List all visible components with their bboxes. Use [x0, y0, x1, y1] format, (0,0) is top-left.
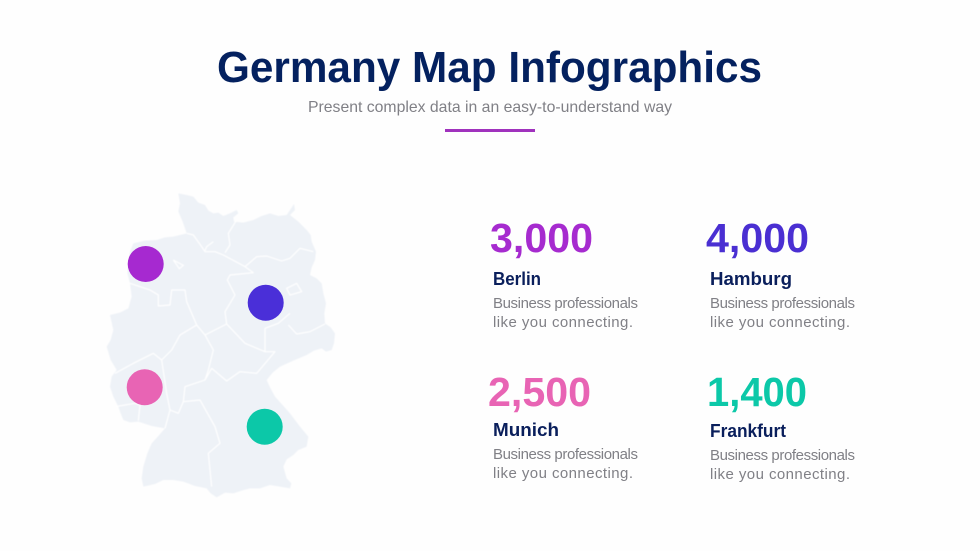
stat: Munich: like you connecting.: [493, 465, 633, 482]
stat: Frankfurt: Business professionals: [710, 447, 855, 464]
title underline: [445, 129, 535, 132]
stat: Hamburg: [706, 215, 855, 331]
stat: Munich: Munich: [493, 420, 559, 440]
stat: Hamburg: Hamburg: [710, 269, 792, 289]
stat: Berlin: Berlin: [493, 269, 541, 289]
stat: Frankfurt: 1,400: [707, 369, 807, 415]
subtitle: Present complex data in an easy-to-understand way: [308, 99, 672, 116]
stat: Berlin: [490, 215, 638, 331]
stat: Hamburg: Business professionals: [710, 295, 855, 312]
map pin: purple: [128, 246, 164, 282]
stat: Berlin: like you connecting.: [493, 314, 633, 331]
stat: Munich: Business professionals: [493, 446, 638, 463]
map pin: pink: [127, 369, 163, 405]
stat: Munich: 2,500: [488, 369, 591, 415]
stat: Berlin: 3,000: [490, 215, 593, 261]
stat: Frankfurt: Frankfurt: [710, 421, 786, 441]
stat: Hamburg: like you connecting.: [710, 314, 850, 331]
title: Germany Map Infographics: [217, 43, 762, 92]
stat: Frankfurt: like you connecting.: [710, 466, 850, 483]
stat: Frankfurt: [707, 369, 855, 483]
stat: Berlin: Business professionals: [493, 295, 638, 312]
map pin: indigo: [248, 285, 284, 321]
stat: Hamburg: 4,000: [706, 215, 809, 261]
map pin: teal: [247, 409, 283, 445]
stat: Munich: [488, 369, 638, 482]
map of Germany: [107, 193, 335, 497]
